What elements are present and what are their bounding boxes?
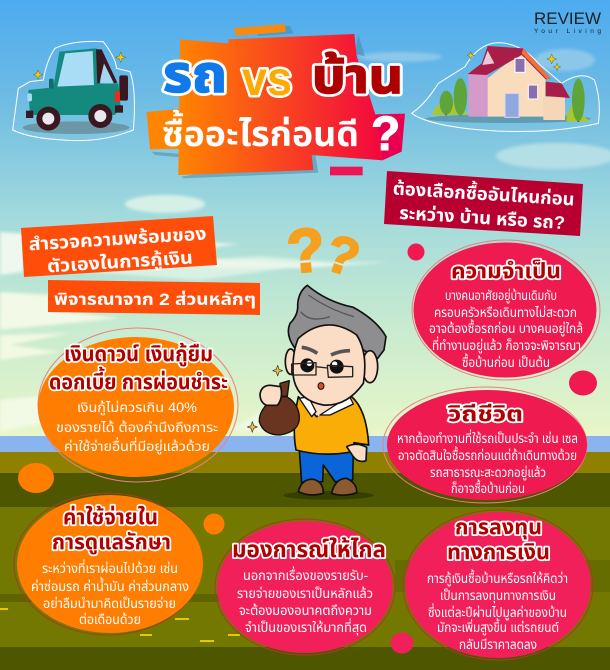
clouds <box>0 49 610 432</box>
banner: two main parts <box>48 280 260 315</box>
left hand <box>260 385 281 405</box>
body text <box>56 399 218 455</box>
body text: มักจะเพิ่มสูงขึ้น แต่รถยนต์ <box>437 618 559 636</box>
banner: which to buy first: ระหว่าง บ้าน หรือ รถ? <box>399 203 566 233</box>
body text: การกู้เงินซื้อบ้านหรือรถให้คิดว่า <box>427 569 568 587</box>
mouth <box>318 383 324 389</box>
question marks: ? <box>284 215 328 287</box>
title word: house: บ้าน <box>312 51 403 104</box>
logo: Review Your Living <box>534 10 601 35</box>
collar <box>299 396 353 417</box>
banner: which to buy first: ต้องเลือกซื้ออันไหนก่อน <box>392 176 575 210</box>
title word: house: บ้าน <box>312 51 403 104</box>
question marks: ? <box>318 224 366 289</box>
title panel <box>147 24 405 178</box>
title word: car: รถ <box>163 46 227 104</box>
money bag <box>259 397 299 435</box>
dot pink middle <box>569 370 597 396</box>
neck <box>308 397 347 417</box>
heading: การดูแลรักษา <box>52 530 171 555</box>
pink bar bottom <box>330 167 363 175</box>
hair <box>288 285 386 358</box>
body text: บางคนอาศัยอยู่บ้านเดิมกับ <box>445 287 557 304</box>
sparkles <box>247 365 283 432</box>
circle: look far ahead <box>215 519 395 655</box>
heading: ดอกเบี้ย การผ่อนชำระ <box>49 366 228 394</box>
dot pink lower <box>390 632 414 654</box>
body text: ค่าใช้จ่ายอื่นที่มีอยู่แล้วด้วย <box>64 437 210 455</box>
title shadow pieces <box>152 26 365 178</box>
eyebrows <box>302 347 350 355</box>
sea band <box>0 436 610 453</box>
face <box>293 325 365 405</box>
body text: ที่ทำงานอยู่แล้ว ก็อาจจะพิจารณา <box>432 336 581 354</box>
trousers <box>299 450 353 483</box>
body text: อย่าลืมนำมาคิดเป็นรายจ่าย <box>43 595 176 611</box>
circle: maintenance costs <box>14 493 203 635</box>
dot pink upper <box>408 244 424 260</box>
dot orange <box>18 463 54 493</box>
body text: ต่อเดือนด้วย <box>79 611 141 627</box>
body text: ครอบครัวหรือเดินทางไม่สะดวก <box>434 304 577 320</box>
background sky <box>0 0 610 436</box>
shoes <box>298 478 357 495</box>
body text: ระหว่างที่เราผ่อนไปด้วย เช่น <box>42 559 178 576</box>
heading <box>49 342 228 394</box>
title word: vs: vs <box>242 53 292 106</box>
body text: จะต้องมองอนาคตถึงความ <box>239 603 372 618</box>
banner: two main parts: พิจารณาจาก 2 ส่วนหลักๆ <box>54 289 256 309</box>
orange bar top <box>234 24 286 36</box>
circle: down payment <box>38 328 238 482</box>
illustration: jeep <box>13 41 134 141</box>
eyes <box>300 358 314 372</box>
body text: รายจ่ายของเราเป็นหลักแล้ว <box>237 585 373 601</box>
ground bands <box>0 452 610 670</box>
body text: เป็นการลงทุนทางการเงิน <box>440 588 556 604</box>
heading: เงินดาวน์ เงินกู้ยืม <box>64 342 213 367</box>
heading: ค่าใช้จ่ายใน <box>63 505 158 529</box>
banner: survey readiness: ตัวเองในการกู้เงิน <box>47 247 194 277</box>
body text <box>397 429 578 496</box>
banner: survey readiness <box>21 216 217 278</box>
ears <box>362 351 378 383</box>
title backing shape <box>178 34 382 175</box>
body text: ก็อาจซื้อบ้านก่อน <box>451 479 525 496</box>
body text: อาจต้องซื้อรถก่อน บางคนอยู่ใกล้ <box>429 319 583 337</box>
body text: ของรายได้ ต้องคำนึงถึงภาระ <box>56 420 218 435</box>
body text <box>429 287 583 370</box>
logo: Review Your Living: REVIEW <box>534 10 601 28</box>
body text: หากต้องทำงานที่ใช้รถเป็นประจำ เช่น เซล <box>397 429 578 446</box>
pink tab right <box>375 114 405 160</box>
right hand <box>347 444 367 461</box>
title question mark: ? <box>371 108 400 161</box>
heading <box>52 505 171 555</box>
body text: กลับมีราคาลดลง <box>459 637 537 652</box>
heading: วิถีชีวิต <box>447 402 523 426</box>
body text <box>237 566 373 636</box>
illustration: house <box>412 43 599 132</box>
title subtitle: ซื้ออะไรก่อนดี <box>162 109 359 154</box>
body text: นอกจากเรื่องของรายรับ- <box>243 566 368 583</box>
circle: financial investment <box>403 510 593 660</box>
hair strands <box>301 295 354 319</box>
banner: which to buy first <box>384 171 583 236</box>
logo: Review Your Living: Your Living <box>534 28 601 35</box>
glasses <box>292 363 353 377</box>
illustration: old man with money bag <box>247 285 386 500</box>
sweater <box>294 397 369 454</box>
body text: ค่าซ่อมรถ ค่าน้ำมัน ค่าส่วนกลาง <box>31 577 189 594</box>
heading: การลงทุน <box>455 515 542 540</box>
body text: รถสาธารณะสะดวกอยู่แล้ว <box>430 464 546 481</box>
body text: อาจตัดสินใจซื้อรถก่อนแต่ถ้าเดินทางด้วย <box>398 446 577 463</box>
heading <box>447 515 550 564</box>
body text <box>427 569 568 652</box>
body text: ซึ่งแต่ละปีผ่านไปมูลค่าของบ้าน <box>428 603 567 621</box>
body text <box>31 559 189 627</box>
title word: car: รถ <box>163 46 227 104</box>
body text: จำเป็นของเราให้มากที่สุด <box>245 618 367 636</box>
body text: ซื้อบ้านก่อน เป็นต้น <box>462 353 550 370</box>
heading: ความจำเป็น <box>451 259 561 283</box>
body text: เงินกู้ไม่ควรเกิน 40% <box>77 399 197 416</box>
heading: มองการณ์ให้ไกล <box>232 536 386 562</box>
question marks <box>284 215 366 289</box>
banner: survey readiness: สำรวจความพร้อมของ <box>28 224 207 254</box>
dot orange lower <box>204 514 224 534</box>
orange tab left <box>147 108 192 149</box>
circle: necessity <box>412 240 600 380</box>
heading: ทางการเงิน <box>447 540 550 564</box>
circle: lifestyle <box>383 387 587 503</box>
ground shadow <box>283 491 373 500</box>
